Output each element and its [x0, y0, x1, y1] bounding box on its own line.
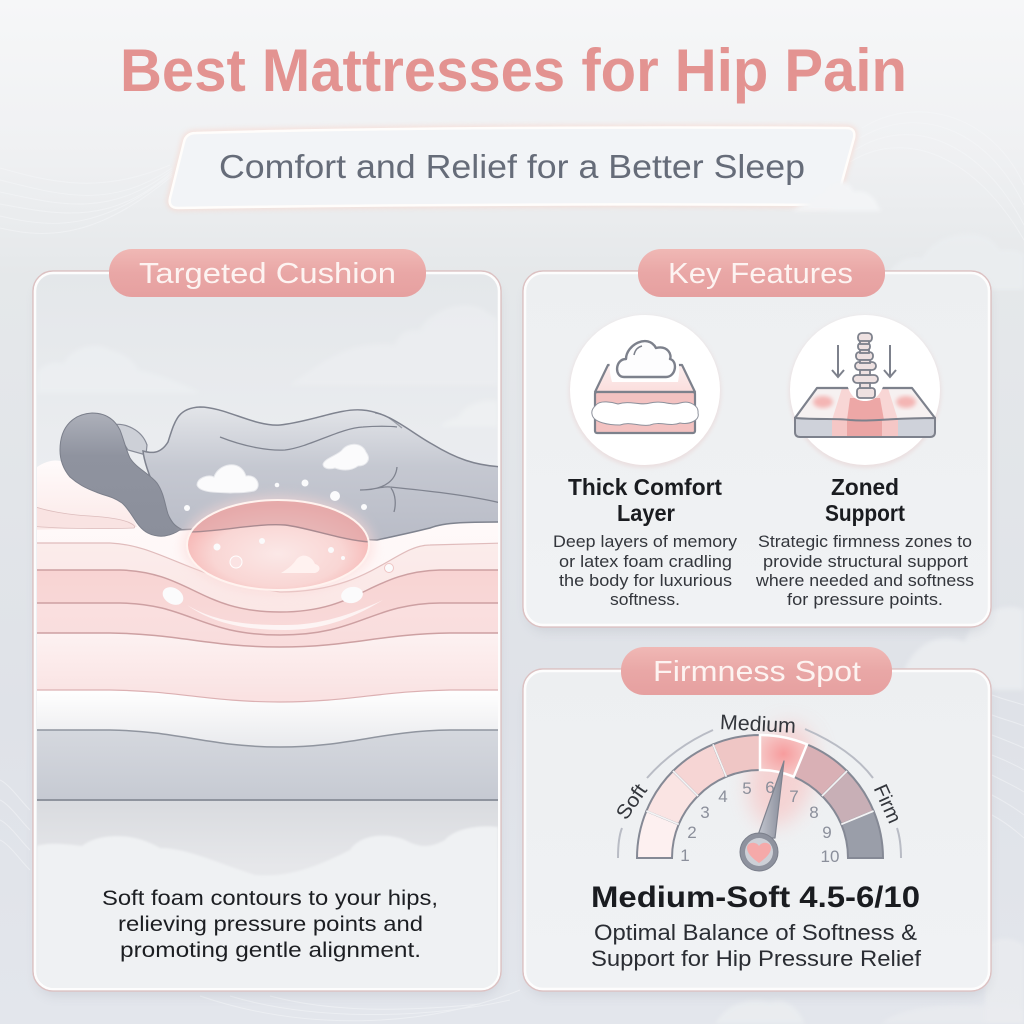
scale numbers: 5: [742, 779, 752, 798]
pill: firmness spot: [621, 647, 892, 695]
small clouds and bubbles: [159, 444, 394, 608]
subtitle banner: [170, 128, 881, 211]
scale numbers: 2: [687, 823, 697, 842]
mattress layers: [30, 512, 505, 810]
pill: firmness spot: Firmness Spot: [653, 656, 861, 688]
feature: zoned support text: where needed and softness: [755, 572, 974, 590]
illustration: hip on mattress: [30, 407, 505, 810]
scale arcs: [618, 729, 901, 858]
scale numbers: 6: [765, 778, 775, 797]
panel card: [33, 271, 501, 991]
sky and ground clouds: [37, 306, 498, 990]
scale numbers: 3: [700, 803, 710, 822]
firmness description: Optimal Balance of Softness &: [594, 920, 917, 945]
banner cloud: [792, 182, 881, 211]
pill: key features: Key Features: [668, 258, 853, 290]
panel: targeted cushion: [30, 249, 505, 996]
segment dividers: [646, 744, 874, 824]
gauge glow: [738, 716, 826, 834]
scale numbers: 8: [809, 803, 819, 822]
scale numbers: 7: [789, 787, 799, 806]
title: Best Mattresses for Hip Pain: [120, 37, 907, 104]
firmness gauge: [612, 711, 905, 871]
scale labels: Medium: [719, 711, 797, 738]
body fold lines: [220, 413, 505, 512]
feature: zoned support text: [755, 474, 974, 609]
panel: firmness spot: [523, 647, 991, 996]
feature: thick comfort layer text: softness.: [610, 591, 680, 609]
panel: key features: [523, 249, 991, 632]
panel shadow: [526, 280, 990, 632]
feature: zoned support text: Strategic firmness zones to: [758, 533, 972, 551]
cushion description: [102, 886, 438, 962]
panel pill: targeted cushion: Targeted Cushion: [139, 258, 396, 290]
pill: key features: [638, 249, 885, 297]
panel card: [523, 669, 991, 991]
panel pill: targeted cushion: [109, 249, 426, 297]
hip highlight ellipse: [181, 495, 375, 595]
spine halo: [847, 330, 884, 401]
feature: zoned support text: Support: [825, 500, 905, 526]
firmness description: [591, 920, 922, 971]
body: [143, 407, 505, 540]
firmness value: Medium-Soft 4.5-6/10: [591, 881, 920, 914]
needle hub with heart: [740, 833, 778, 871]
panel shadow: [36, 280, 500, 996]
subtitle text: Comfort and Relief for a Better Sleep: [219, 148, 805, 185]
mattress top: [795, 388, 935, 418]
feature: thick comfort layer text: the body for luxurious: [559, 572, 732, 590]
scale labels: [612, 711, 905, 827]
panel shadow: [526, 678, 990, 996]
feature: thick comfort layer text: Deep layers of memory: [553, 533, 738, 551]
hair: [60, 413, 181, 536]
feature: thick comfort layer text: Thick Comfort: [568, 474, 722, 500]
scale numbers: 4: [718, 787, 728, 806]
scale numbers: 9: [822, 823, 832, 842]
icon: zoned support: [789, 315, 941, 468]
scale numbers: 1: [680, 846, 690, 865]
scale labels: Soft: [612, 780, 652, 824]
scale numbers: 10: [821, 847, 839, 866]
feature: thick comfort layer text: Layer: [617, 500, 675, 526]
feature: zoned support text: Zoned: [831, 474, 899, 500]
panel card: [523, 271, 991, 627]
cushion description: Soft foam contours to your hips,: [102, 886, 438, 910]
spine vertebrae: [853, 333, 878, 398]
hair back piece: [112, 424, 147, 455]
pillow: [30, 461, 137, 530]
scale labels: Firm: [869, 781, 905, 827]
mattress front: [795, 418, 935, 437]
crescent highlight: [187, 600, 383, 630]
scale numbers: [680, 778, 839, 866]
cushion description: promoting gentle alignment.: [120, 938, 421, 962]
icon: thick comfort layer: [569, 315, 721, 468]
feature: zoned support text: provide structural support: [763, 553, 968, 571]
needle: [757, 761, 784, 838]
feature: thick comfort layer text: [553, 474, 738, 609]
feature: thick comfort layer text: or latex foam cradling: [559, 553, 732, 571]
cushion description: relieving pressure points and: [118, 912, 423, 936]
firmness description: Support for Hip Pressure Relief: [591, 946, 922, 971]
feature: zoned support text: for pressure points.: [787, 591, 943, 609]
gauge segments: [637, 735, 883, 858]
